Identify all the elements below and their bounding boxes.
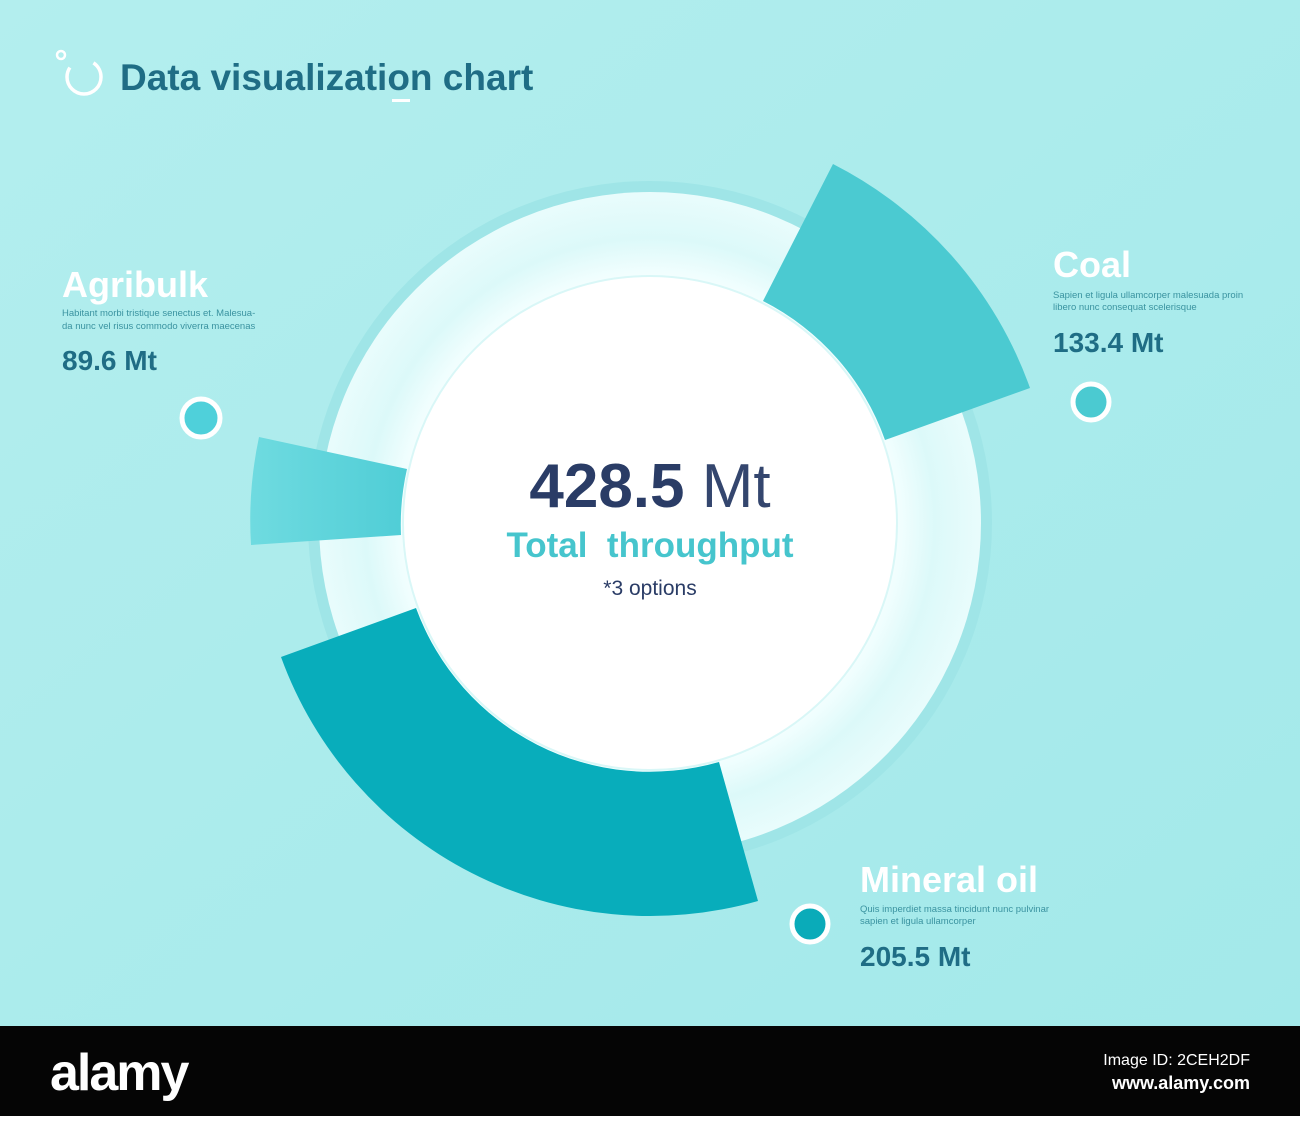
- center total: 428.5 Mt: [529, 452, 771, 521]
- title: [57, 51, 533, 102]
- marker: Agribulk: [182, 399, 220, 437]
- footer band: Image ID: 2CEH2DF: [1103, 1052, 1250, 1069]
- title: Data visualization chart: [120, 57, 533, 98]
- label: Coal: Coal: [1053, 244, 1131, 285]
- label: Mineral oil: 205.5 Mt: [860, 941, 970, 972]
- label: Mineral oil: Mineral oil: [860, 859, 1038, 900]
- label: Mineral oil: Quis imperdiet massa tincidunt nunc pulvinar: [860, 904, 1049, 915]
- label: Agribulk: [62, 264, 256, 376]
- center note: *3 options: [603, 577, 697, 600]
- chart: donut: [250, 164, 1030, 916]
- label: Mineral oil: sapien et ligula ullamcorper: [860, 916, 976, 927]
- icon: title ring: [57, 51, 101, 94]
- label: Agribulk: Agribulk: [62, 264, 209, 305]
- label: Coal: libero nunc consequat scelerisque: [1053, 302, 1197, 313]
- label: Mineral oil: [860, 859, 1049, 972]
- footer band: www.alamy.com: [1111, 1073, 1250, 1093]
- footer band: [0, 1026, 1300, 1116]
- label: Agribulk: Habitant morbi tristique senectus et. Malesua-: [62, 308, 255, 319]
- sector: Agribulk: [250, 437, 407, 545]
- center label: Total throughput: [506, 526, 794, 565]
- sector: Mineral oil: [281, 608, 758, 916]
- marker: Mineral oil: [792, 906, 828, 942]
- label: Coal: [1053, 244, 1243, 358]
- label: Coal: Sapien et ligula ullamcorper malesuada proin: [1053, 290, 1243, 301]
- footer band: alamy: [50, 1044, 190, 1102]
- label: Coal: 133.4 Mt: [1053, 327, 1164, 358]
- sector: Coal: [763, 164, 1030, 440]
- label: Agribulk: 89.6 Mt: [62, 345, 157, 376]
- marker: Coal: [1073, 384, 1109, 420]
- label: Agribulk: da nunc vel risus commodo viverra maecenas: [62, 321, 256, 332]
